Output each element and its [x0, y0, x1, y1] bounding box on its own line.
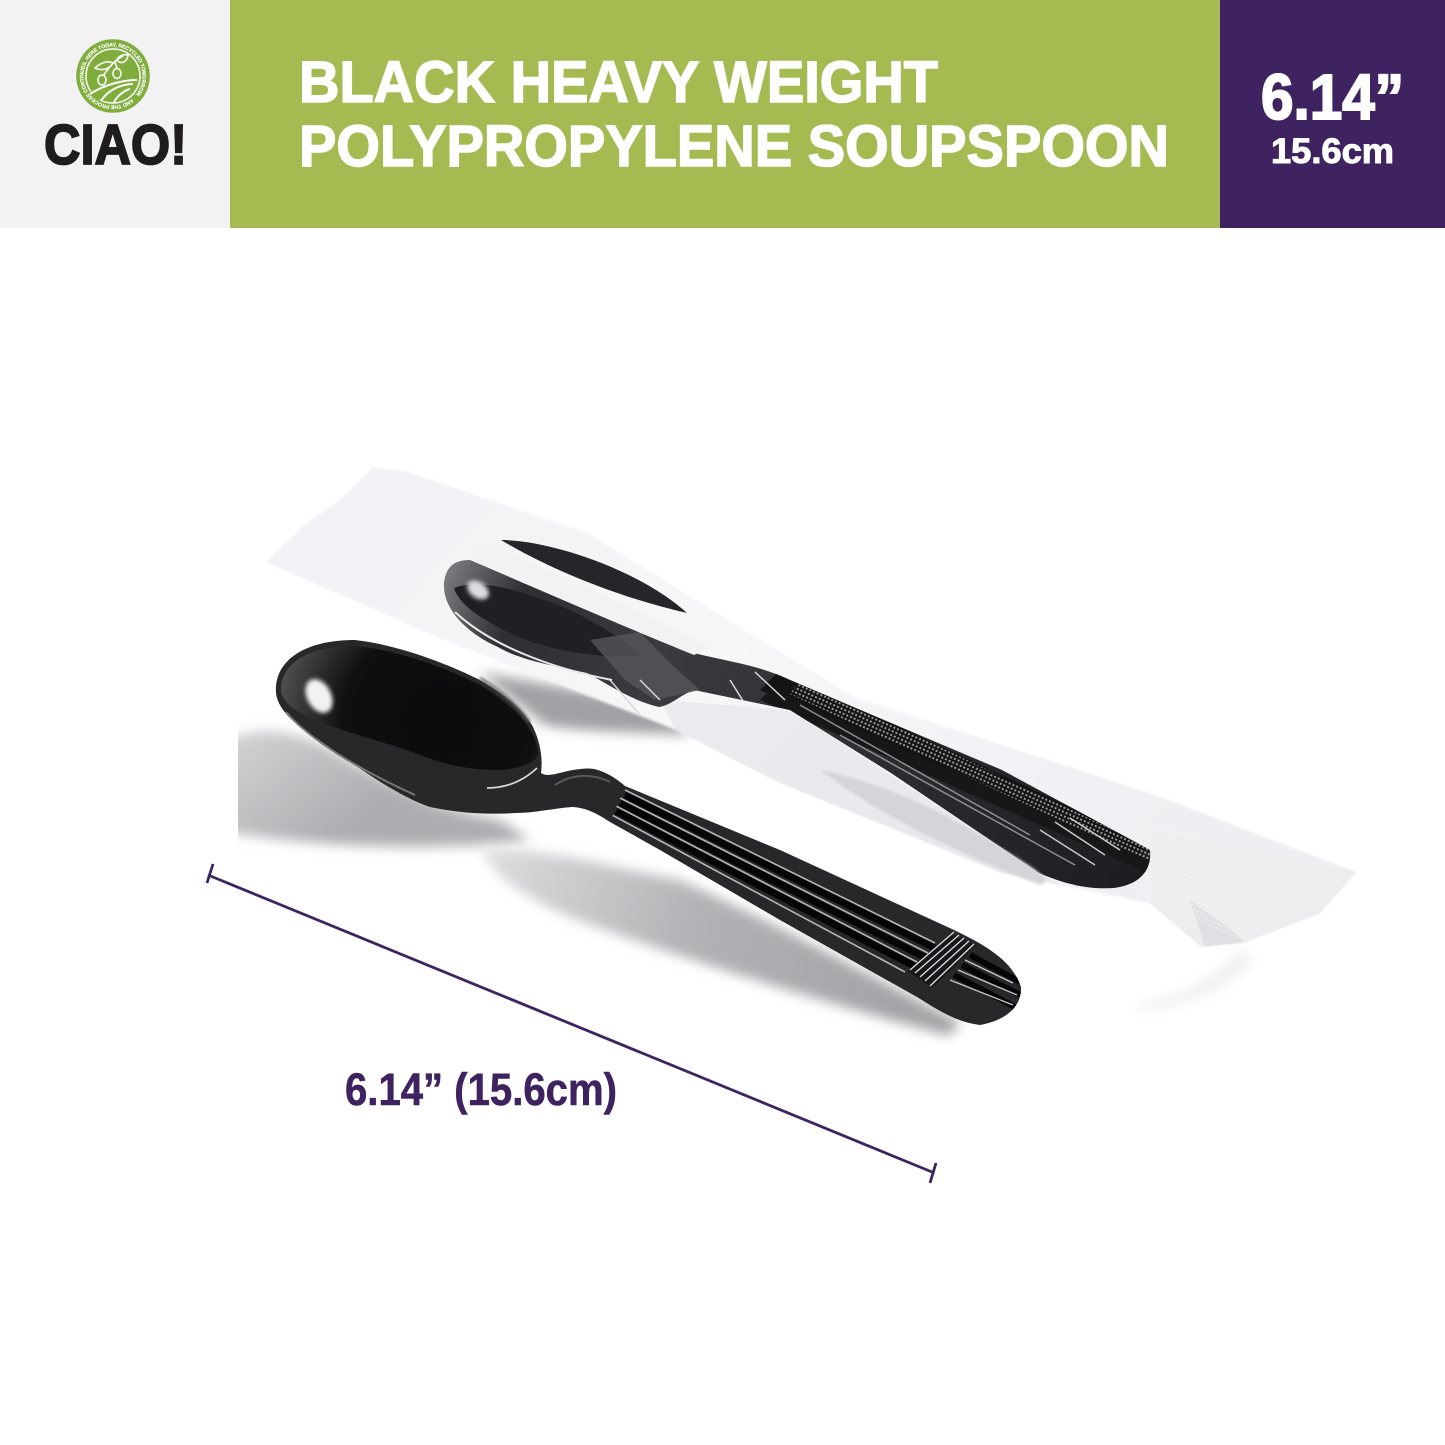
logo wordmark: CIAO! — [44, 113, 187, 177]
product photo illustration — [215, 467, 1356, 1036]
size in centimetres: 15.6cm — [1271, 132, 1394, 171]
spoon silhouette — [276, 640, 1021, 1025]
spoon bowl interior — [281, 646, 538, 770]
handle ribs — [612, 790, 1020, 1007]
wrapped spoon: silhouette — [444, 560, 1150, 888]
wrapped spoon: back of bowl — [501, 540, 687, 613]
title — [299, 50, 1169, 179]
dimension arrow — [207, 864, 936, 1183]
cast shadows — [215, 672, 1255, 1036]
icon: Ciao olive badge: AND THE PROCESS CONTINUES. HERE TODAY, RECYCLED TOMORROW. — [80, 42, 146, 110]
loose spoon — [276, 640, 1021, 1025]
header: title panel — [230, 0, 1220, 228]
plastic fold over handle — [820, 770, 1045, 885]
title: BLACK HEAVY WEIGHT — [299, 50, 938, 115]
title: POLYPROPYLENE SOUPSPOON — [299, 114, 1169, 179]
wrapped handle detail — [730, 670, 1155, 872]
wrapped spoon — [444, 540, 1155, 888]
plastic wrapper — [266, 467, 1356, 947]
size in inches: 6.14” — [1261, 61, 1404, 133]
dimension label: 6.14” (15.6cm) — [345, 1064, 617, 1115]
header: size panel — [1220, 0, 1445, 228]
pleated seam band — [470, 543, 710, 655]
header: logo panel — [0, 0, 230, 228]
